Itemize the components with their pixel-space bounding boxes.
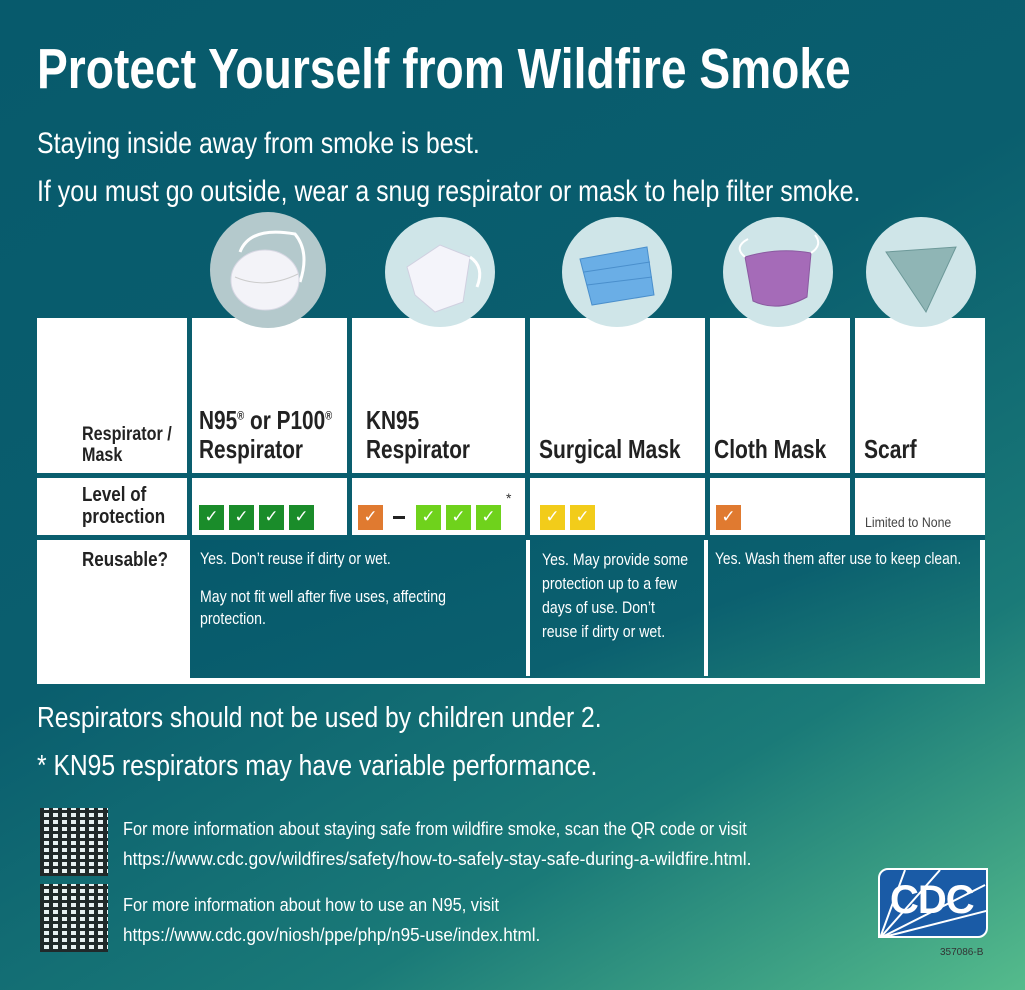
header: N95: N95® or P100® [199, 405, 332, 435]
text: * [506, 490, 511, 506]
subtitle [37, 127, 860, 208]
text: ✓ [421, 507, 436, 527]
reusable N95/KN95: May not fit well after five uses, affecting [200, 587, 446, 606]
label: reusable: Reusable? [82, 549, 168, 571]
reusable N95/KN95 [200, 549, 446, 628]
checks N95 [199, 505, 314, 530]
text: ✓ [481, 507, 496, 527]
subtitle: Staying inside away from smoke is best. [37, 127, 480, 160]
CDC logo: CDC [890, 878, 974, 922]
text: ✓ [575, 507, 590, 527]
text: ✓ [234, 507, 249, 527]
header: N95 [199, 405, 332, 464]
label: level of protection [82, 484, 165, 528]
icon: cloth mask [723, 217, 833, 327]
info text 1: For more information about staying safe from wildfire smoke, scan the QR code or visit [123, 819, 747, 839]
reusable surgical: days of use. Don’t [542, 598, 655, 617]
text: ✓ [204, 507, 219, 527]
header: row label [82, 424, 172, 466]
info text 2 [123, 895, 540, 945]
QR code 2 [40, 884, 108, 952]
header: row label: Mask [82, 445, 122, 466]
note: KN95: * KN95 respirators may have variable performance. [37, 750, 597, 782]
header: N95: Respirator [199, 434, 303, 464]
reusable surgical: reuse if dirty or wet. [542, 622, 665, 641]
icon: KN95 [385, 217, 495, 327]
icon: scarf [866, 217, 976, 327]
header: scarf: Scarf [864, 434, 917, 464]
header: KN95: Respirator [366, 434, 470, 464]
label: level of protection: protection [82, 506, 165, 528]
checks KN95 [358, 490, 512, 530]
header: cloth: Cloth Mask [714, 434, 826, 464]
header: row label: Respirator / [82, 424, 172, 445]
info text 2: https://www.cdc.gov/niosh/ppe/php/n95-use/index.html. [123, 925, 540, 945]
reusable surgical [542, 550, 688, 641]
checks surgical [540, 505, 595, 530]
title: Protect Yourself from Wildfire Smoke [37, 37, 851, 101]
reusable N95/KN95: protection. [200, 609, 266, 628]
reusable dark cells [190, 540, 980, 678]
text: ✓ [294, 507, 309, 527]
label: level of protection: Level of [82, 484, 146, 506]
header: KN95: KN95 [366, 405, 419, 435]
text: ✓ [451, 507, 466, 527]
text: ✓ [721, 507, 736, 527]
CDC logo [878, 868, 988, 938]
info text 2: For more information about how to use an N95, visit [123, 895, 499, 915]
header: KN95 [366, 405, 470, 464]
reusable surgical: Yes. May provide some [542, 550, 688, 569]
table [37, 318, 985, 684]
info text 1: https://www.cdc.gov/wildfires/safety/how-to-safely-stay-safe-during-a-wildfire.html. [123, 849, 751, 869]
reusable surgical: protection up to a few [542, 574, 677, 593]
reusable N95/KN95: Yes. Don’t reuse if dirty or wet. [200, 549, 391, 568]
subtitle: If you must go outside, wear a snug respirator or mask to help filter smoke. [37, 175, 860, 208]
code number: 357086-B [940, 947, 983, 958]
info text 1 [123, 819, 751, 869]
icon: N95 [210, 212, 326, 328]
text: ✓ [264, 507, 279, 527]
reusable cloth: Yes. Wash them after use to keep clean. [715, 549, 961, 568]
QR code 1 [40, 808, 108, 876]
scarf protection: Limited to None [865, 514, 951, 530]
text: ✓ [363, 507, 378, 527]
header: surgical: Surgical Mask [539, 434, 681, 464]
icon: surgical mask [562, 217, 672, 327]
note: children: Respirators should not be used by children under 2. [37, 702, 602, 734]
text: ✓ [545, 507, 560, 527]
